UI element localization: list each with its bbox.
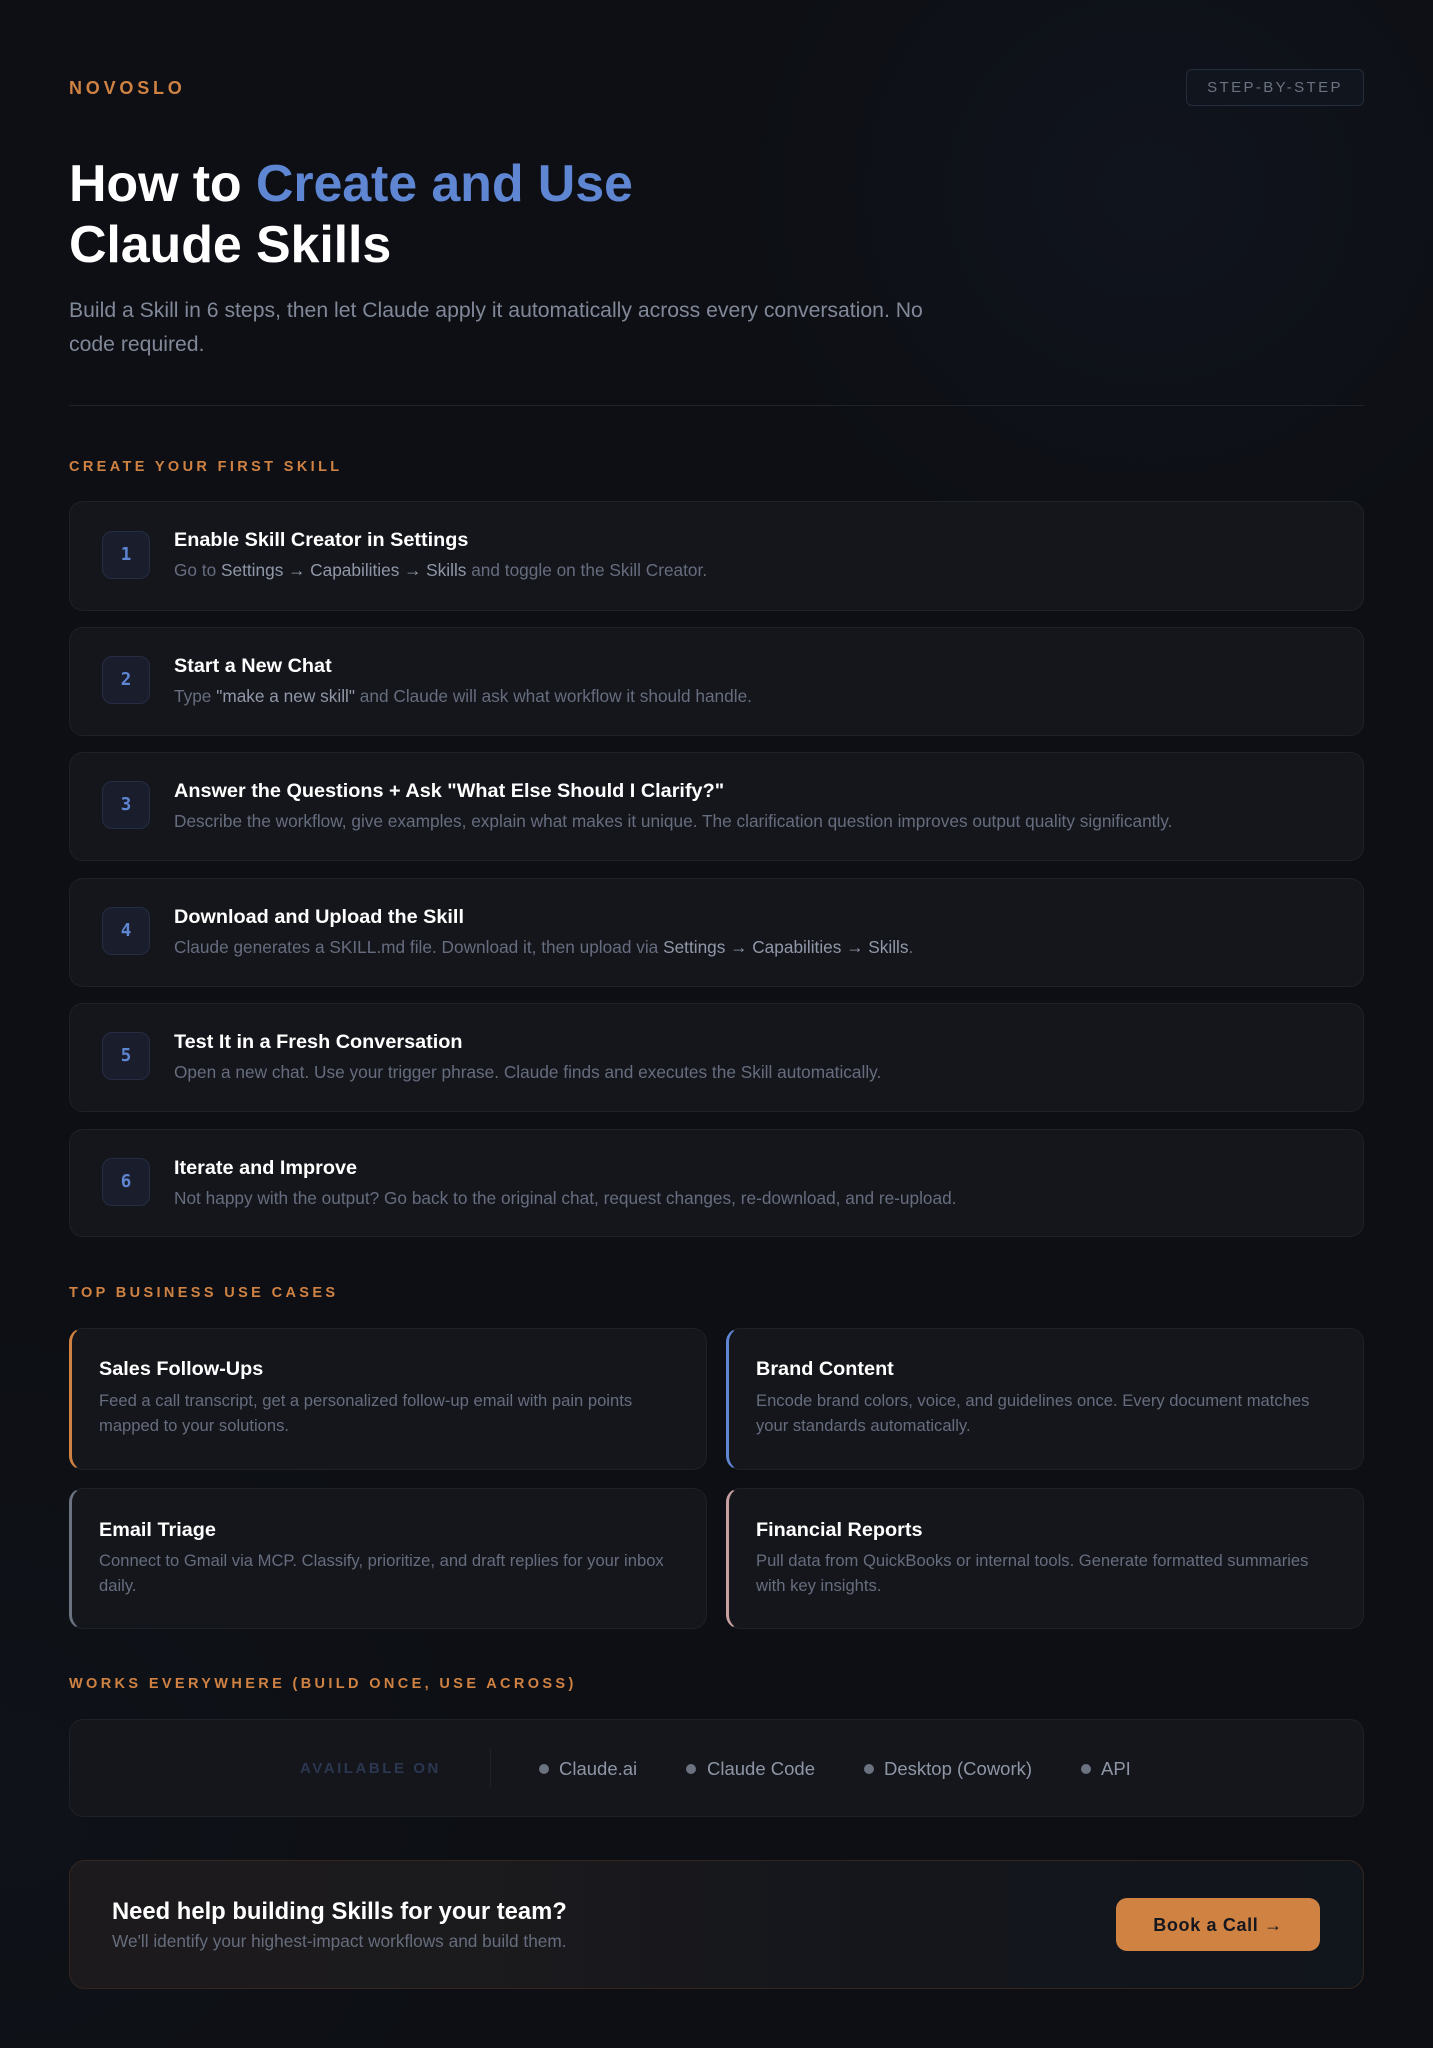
step 1 title: Enable Skill Creator in Settings [174,529,468,551]
brand title: Brand Content [756,1358,894,1380]
subtitle: code required. [69,333,204,356]
step 5 [69,1003,1364,1112]
subtitle: Build a Skill in 6 steps, then let Claude apply it automatically across every conversation. No [69,299,923,322]
step 1 description: Go to Settings → Capabilities → Skills and toggle on the Skill Creator. [174,560,707,580]
step 4 description: Claude generates a SKILL.md file. Download it, then upload via Settings → Capabilities → Skills. [174,937,913,957]
panel: call to action [69,1860,1364,1989]
sales description: mapped to your solutions. [99,1416,289,1435]
use case: brand content [726,1328,1364,1470]
step 2 [69,627,1364,736]
title: How to Create and Use [69,155,633,213]
platform: Claude.ai: Claude.ai [559,1758,637,1779]
badge: step-by-step [1186,69,1364,106]
title: Claude Skills [69,216,391,274]
platform dot: Desktop [864,1764,874,1774]
step 5 title: Test It in a Fresh Conversation [174,1031,463,1053]
step 3 title: Answer the Questions + Ask "What Else Should I Clarify?" [174,780,724,802]
step number 4 [102,907,150,955]
panel: available on [69,1719,1364,1817]
button: book a call [1116,1898,1320,1951]
platform: API: API [1101,1758,1131,1779]
financial description: with key insights. [756,1576,881,1595]
badge: step-by-step: STEP-BY-STEP [1207,79,1343,96]
divider [69,405,1364,406]
brand description [756,1391,1309,1435]
step 6 title: Iterate and Improve [174,1157,357,1179]
platform dot: Claude.ai [539,1764,549,1774]
step 4 title: Download and Upload the Skill [174,906,464,928]
sales title: Sales Follow-Ups [99,1358,263,1380]
step 6 [69,1129,1364,1237]
use case: sales follow-ups [69,1328,707,1470]
step number 4: 4 [121,921,131,941]
brand description: Encode brand colors, voice, and guidelines once. Every document matches [756,1391,1309,1410]
platform: Claude Code: Claude Code [707,1758,815,1779]
cta heading: Need help building Skills for your team? [112,1898,567,1925]
use case: email triage [69,1488,707,1629]
vertical divider [490,1749,491,1787]
cta description: We'll identify your highest-impact workflows and build them. [112,1931,567,1951]
step number 1 [102,531,150,579]
financial title: Financial Reports [756,1519,923,1541]
step number 5: 5 [121,1046,131,1066]
sales description [99,1391,632,1435]
step number 6 [102,1158,150,1206]
email description: daily. [99,1576,137,1595]
step number 5 [102,1032,150,1080]
step number 2 [102,656,150,704]
subtitle [69,299,923,356]
brand: Novoslo: NOVOSLO [69,78,186,98]
use case: financial reports [726,1488,1364,1629]
heading: create your first skill: CREATE YOUR FIRST SKILL [69,459,343,475]
email description [99,1551,664,1595]
button: book a call: Book a Call → [1153,1915,1283,1935]
available on label: AVAILABLE ON [300,1760,441,1777]
step number 3 [102,781,150,829]
step 2 description: Type "make a new skill" and Claude will ask what workflow it should handle. [174,686,752,706]
brand description: your standards automatically. [756,1416,971,1435]
title [69,155,633,274]
heading: top business use cases: TOP BUSINESS USE CASES [69,1285,338,1301]
step number 3: 3 [121,795,131,815]
step 3 [69,752,1364,861]
step 5 description: Open a new chat. Use your trigger phrase. Claude finds and executes the Skill automatically. [174,1062,881,1082]
email description: Connect to Gmail via MCP. Classify, prioritize, and draft replies for your inbox [99,1551,664,1570]
step 2 title: Start a New Chat [174,655,332,677]
financial description: Pull data from QuickBooks or internal tools. Generate formatted summaries [756,1551,1308,1570]
sales description: Feed a call transcript, get a personalized follow-up email with pain points [99,1391,632,1410]
step number 1: 1 [121,545,131,565]
email title: Email Triage [99,1519,216,1541]
platform: Desktop (Cowork): Desktop (Cowork) [884,1758,1032,1779]
step 4 [69,878,1364,987]
step number 2: 2 [121,670,131,690]
step number 6: 6 [121,1172,131,1192]
platform dot: Claude Code [686,1764,696,1774]
platform dot: API [1081,1764,1091,1774]
financial description [756,1551,1308,1595]
step 6 description: Not happy with the output? Go back to the original chat, request changes, re-download, and re-upload. [174,1188,956,1208]
step 1 [69,501,1364,611]
step 3 description: Describe the workflow, give examples, explain what makes it unique. The clarification question improves output quality significantly. [174,811,1172,831]
heading: works everywhere: WORKS EVERYWHERE (BUILD ONCE, USE ACROSS) [69,1676,577,1692]
